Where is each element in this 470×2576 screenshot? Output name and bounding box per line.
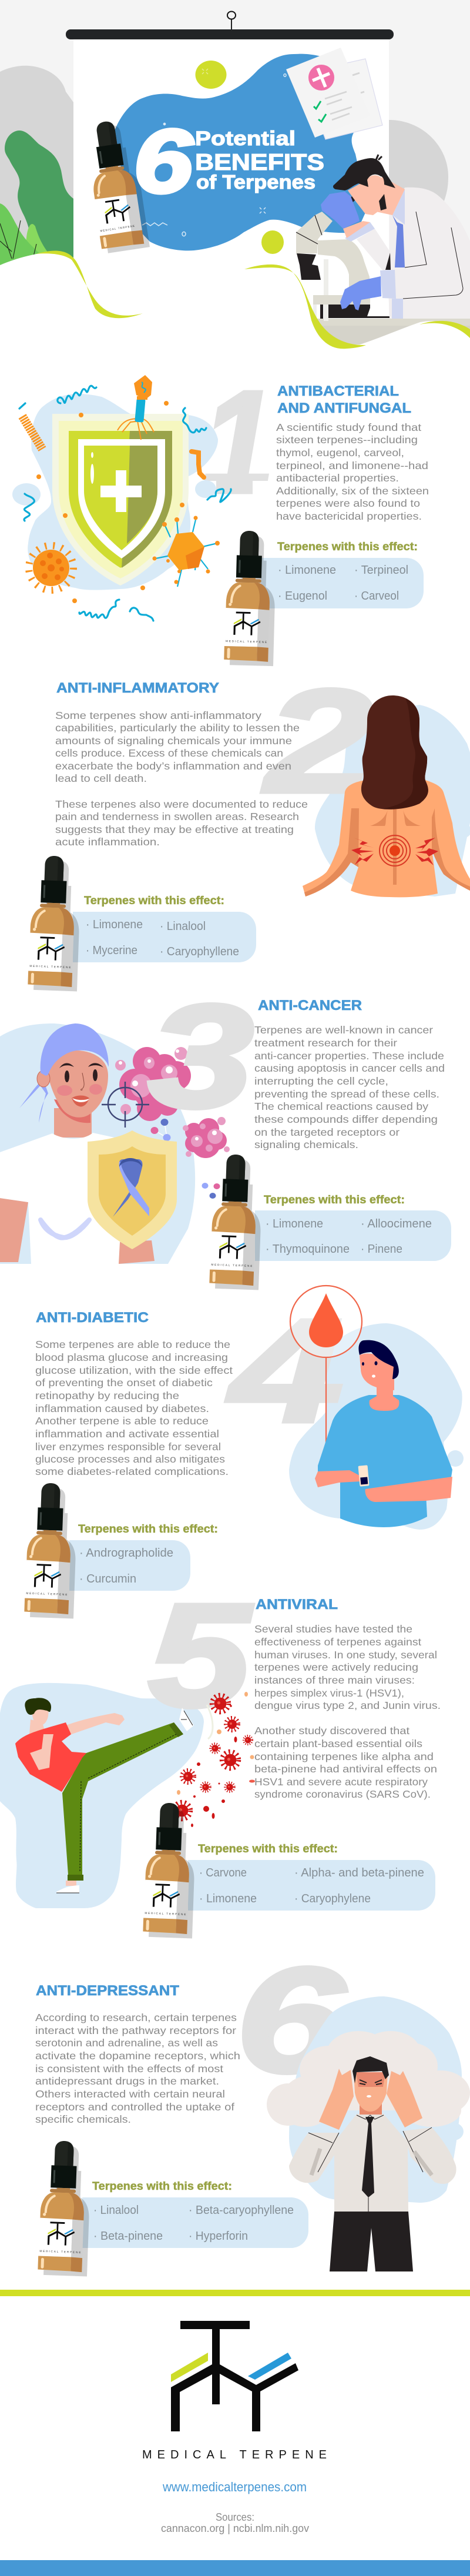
terpene list pill: · Alloocimene: [361, 1217, 432, 1230]
bottle: MEDICAL TERPENE: [145, 1912, 186, 1916]
body text: terpineol, and limonene--had: [276, 460, 428, 471]
terpenes heading: Terpenes with this effect:: [198, 1843, 338, 1855]
scientist at microscope: [296, 155, 470, 344]
terpene list pill: · Limonene: [278, 564, 336, 577]
kicking man: [15, 1698, 194, 1893]
stress cloud: [267, 2031, 470, 2127]
bottle: MEDICAL TERPENE: [39, 2250, 80, 2254]
body text: preventing the spread of these cells.: [254, 1088, 439, 1100]
white wave with lime crescents: [0, 250, 470, 376]
body text: on the targeted receptors or: [254, 1126, 400, 1138]
background hills: [0, 66, 448, 265]
hero bottle: [83, 118, 150, 254]
body text: serotonin and adrenaline, as well as: [35, 2037, 218, 2049]
body text: inflammation caused by diabetes.: [35, 1403, 209, 1414]
terpene list pill: · Alpha- and beta-pinene: [294, 1866, 424, 1879]
terpene list pill: · Caryophylene: [294, 1892, 371, 1905]
blood drop balloon: [290, 1286, 362, 1467]
cancer cells: [115, 1047, 230, 1158]
bottle: [224, 530, 277, 666]
ribbon shield: [88, 1130, 177, 1249]
hero title: 6: [133, 111, 193, 212]
body text: exacerbate the body’s inflammation and even: [55, 760, 291, 772]
section 3: anti-cancer: [0, 974, 451, 1290]
footer logo: [171, 2321, 298, 2431]
body text: terpenes were actively reducing: [254, 1661, 418, 1673]
heading: ANTI-INFLAMMATORY: [56, 680, 219, 696]
body text: acute inflammation.: [55, 836, 160, 848]
body text: pain and tenderness in swollen areas. Research: [55, 811, 299, 822]
body text: thymol, eugenol, carveol,: [276, 447, 404, 459]
body text: These terpenes also were documented to reduce: [55, 798, 308, 810]
terpene list pill: · Limonene: [86, 918, 143, 931]
terpene list pill: · Terpineol: [354, 564, 408, 577]
pale blob: [289, 1323, 462, 1530]
body text: glucose processes and also mitigates: [35, 1453, 225, 1465]
terpene list pill: · Limonene: [266, 1217, 323, 1230]
bottle: [209, 1154, 263, 1290]
phage: [118, 375, 154, 440]
sun virus: [29, 546, 73, 590]
terpene list pill: [82, 2197, 308, 2248]
body text: these compounds differ depending: [254, 1113, 438, 1125]
terpene list pill: · Caryophyllene: [160, 945, 239, 958]
body text: treatment research for their: [254, 1037, 397, 1049]
number 4: 4: [226, 1289, 343, 1453]
bottle: MEDICAL TERPENE: [211, 1263, 252, 1267]
terpene list pill: [261, 558, 424, 608]
bottle: [28, 855, 82, 991]
patient with bandana: [0, 1023, 155, 1264]
body text: anti-cancer properties. These include: [254, 1050, 444, 1062]
report papers: [286, 48, 382, 139]
brand name: MEDICAL TERPENE: [142, 2448, 327, 2461]
heading: [277, 383, 411, 416]
body text: Some terpenes show anti-inflammatory: [55, 710, 261, 721]
terpene list pill: · Linalool: [93, 2204, 139, 2217]
polyhedral virus: [153, 516, 220, 587]
number 1: 1: [202, 361, 274, 523]
body text: terpenes were also found to: [276, 497, 420, 509]
body text: [35, 2012, 240, 2125]
terpene list pill: [73, 912, 256, 962]
terpene list pill: · Thymoquinone: [266, 1243, 350, 1256]
terpene list pill: · Andrographolide: [79, 1547, 173, 1560]
body text: inflammation and activate essential: [35, 1428, 219, 1440]
lime divider: [0, 2290, 470, 2296]
terpene list pill: · Mycerine: [86, 944, 137, 957]
heading: AND ANTIFUNGAL: [277, 400, 411, 416]
projection screen: [73, 39, 389, 333]
body text: amounts of signaling chemicals your immune: [55, 735, 292, 747]
body text: According to research, certain terpenes: [35, 2012, 237, 2023]
pale blob: [0, 1023, 195, 1264]
heading: ANTIVIRAL: [256, 1597, 338, 1612]
pale blob: [0, 1683, 204, 1908]
body text: [254, 1024, 445, 1150]
body text: antibacterial properties.: [276, 472, 399, 484]
plant leaves: [0, 131, 73, 276]
body text: blood plasma glucose and increasing: [35, 1351, 228, 1363]
body text: is consistent with the effects of most: [35, 2063, 223, 2075]
body text: some diabetes-related complications.: [35, 1466, 229, 1477]
body text: Terpenes are well-known in cancer: [254, 1024, 433, 1036]
bottle: [143, 1802, 197, 1938]
body text: interrupting the cell cycle,: [254, 1075, 388, 1087]
body text: sixteen terpenes--including: [276, 434, 418, 446]
body text: dengue virus type 2, and Junin virus.: [254, 1700, 441, 1711]
terpene list pill: [255, 1210, 451, 1261]
bottle: [24, 1483, 78, 1618]
terpene list pill: · Hyperforin: [189, 2230, 248, 2243]
body text: [276, 421, 429, 522]
body text: syndrome coronavirus (SARS CoV).: [254, 1788, 431, 1800]
body text: cells produce. Excess of these chemicals can: [55, 747, 283, 759]
body text: Several studies have tested the: [254, 1623, 412, 1635]
body text: certain plant-based essential oils: [254, 1738, 422, 1749]
body text: herpes simplex virus-1 (HSV1),: [254, 1687, 404, 1699]
terpene list pill: [69, 1540, 190, 1591]
hero title: [133, 111, 324, 212]
body text: glucose utilization, with the side effect: [35, 1364, 233, 1376]
number 6: 6: [236, 1936, 346, 2103]
terpene list pill: · Carveol: [354, 590, 399, 603]
section 6: anti-depressant: [35, 1936, 470, 2276]
confetti marks: [142, 69, 286, 236]
body text: [254, 1623, 441, 1800]
molecules: [150, 1119, 220, 1199]
body text: Another terpene is able to reduce: [35, 1415, 209, 1427]
blue squiggles: [19, 386, 231, 621]
heading: ANTIBACTERIAL: [277, 383, 399, 399]
shield: [52, 414, 189, 586]
body text: of preventing the onset of diabetic: [35, 1377, 213, 1389]
body text: HSV1 and severe acute respiratory: [254, 1776, 428, 1788]
body text: Another study discovered that: [254, 1725, 409, 1737]
body text: [35, 1339, 233, 1477]
terpene list pill: · Carvone: [199, 1866, 247, 1879]
terpene list pill: [188, 1860, 435, 1911]
bottle: MEDICAL TERPENE: [26, 1592, 67, 1596]
number 3: 3: [148, 974, 254, 1138]
body text: Some terpenes are able to reduce the: [35, 1339, 230, 1350]
section 5: antiviral: [0, 1573, 441, 1938]
terpenes heading: Terpenes with this effect:: [277, 541, 418, 553]
body text: [55, 710, 308, 848]
pale blob: [289, 1996, 462, 2203]
sources: [161, 2511, 309, 2534]
hero panel: [0, 0, 470, 376]
woman with back pain: [303, 695, 470, 897]
section 2: anti-inflammatory: [28, 659, 470, 991]
heading: ANTI-DEPRESSANT: [36, 1983, 179, 1999]
heading: ANTI-DIABETIC: [36, 1310, 149, 1326]
hero bottle: MEDICAL TERPENE: [100, 225, 135, 232]
body text: Others interacted with certain neural: [35, 2088, 225, 2100]
sources: Sources:: [216, 2511, 254, 2523]
terpene list pill: · Linalool: [160, 920, 206, 933]
body text: have bactericidal properties.: [276, 510, 422, 522]
shock arc: [207, 1705, 213, 1739]
hero title: of Terpenes: [196, 171, 315, 193]
body text: The chemical reactions caused by: [254, 1100, 428, 1112]
orange spring: [22, 416, 42, 449]
hero title: Potential: [195, 128, 296, 150]
body text: effectiveness of terpenes against: [254, 1636, 421, 1648]
body text: antidepressant drugs in the market.: [35, 2075, 219, 2087]
terpene list pill: · Eugenol: [278, 590, 327, 603]
section 4: anti-diabetic: [24, 1286, 464, 1618]
heading: ANTI-CANCER: [258, 998, 362, 1013]
body text: instances of three main viruses:: [254, 1674, 415, 1686]
bottle: MEDICAL TERPENE: [226, 640, 267, 644]
body text: Additionally, six of the sixteen: [276, 485, 429, 497]
dot: [457, 824, 470, 838]
man with glucose meter: [315, 1340, 452, 1527]
target reticle: [102, 1082, 149, 1128]
body text: A scientific study found that: [276, 421, 421, 433]
body text: signaling chemicals.: [254, 1139, 358, 1150]
body text: lead to cell death.: [55, 772, 147, 784]
body text: activate the dopamine receptors, which: [35, 2050, 240, 2062]
terpene list pill: · Curcumin: [79, 1573, 136, 1585]
pale blob: [315, 705, 470, 896]
terpene list pill: · Beta-pinene: [93, 2230, 163, 2243]
body text: liver enzymes responsible for several: [35, 1441, 221, 1453]
hero title: BENEFITS: [195, 150, 324, 175]
body text: beta-pinene had antiviral effects on: [254, 1763, 437, 1775]
body text: interact with the pathway receptors for: [35, 2025, 236, 2036]
section 1: antibacterial: [12, 361, 429, 666]
terpenes heading: Terpenes with this effect:: [84, 895, 224, 907]
red viruses: [174, 1692, 255, 1827]
screen hanger: [66, 12, 394, 39]
bottom bar: [0, 2560, 470, 2576]
body text: specific chemicals.: [35, 2113, 131, 2125]
terpene list pill: · Limonene: [199, 1892, 257, 1905]
number 2: 2: [263, 659, 374, 823]
orange dots: [36, 401, 204, 603]
bottle: MEDICAL TERPENE: [29, 965, 70, 969]
terpenes heading: Terpenes with this effect:: [78, 1523, 218, 1535]
body text: receptors and controlled the uptake of: [35, 2101, 234, 2113]
body text: suggests that they may be effective at treating: [55, 824, 294, 835]
website: www.medicalterpenes.com: [162, 2480, 307, 2494]
terpene list pill: · Beta-caryophyllene: [189, 2204, 294, 2217]
lime circles: [195, 61, 284, 254]
terpenes heading: Terpenes with this effect:: [264, 1194, 405, 1206]
body text: causing apoptosis in cancer cells and: [254, 1062, 445, 1074]
blue blob: [114, 54, 367, 250]
illustration: shield with viruses: [12, 375, 231, 621]
number 5: 5: [148, 1573, 253, 1737]
terpene list pill: · Pinene: [361, 1243, 402, 1256]
terpenes heading: Terpenes with this effect:: [92, 2180, 232, 2193]
sources: cannacon.org | ncbi.nlm.nih.gov: [161, 2523, 309, 2534]
bottle: [38, 2140, 92, 2276]
body text: containing terpenes like alpha and: [254, 1751, 434, 1762]
stressed man: [289, 2056, 456, 2271]
body text: human viruses. In one study, several: [254, 1649, 437, 1661]
body text: retinopathy by reducing the: [35, 1390, 179, 1401]
body text: capabilities, particularly the ability to lessen the: [55, 722, 300, 734]
